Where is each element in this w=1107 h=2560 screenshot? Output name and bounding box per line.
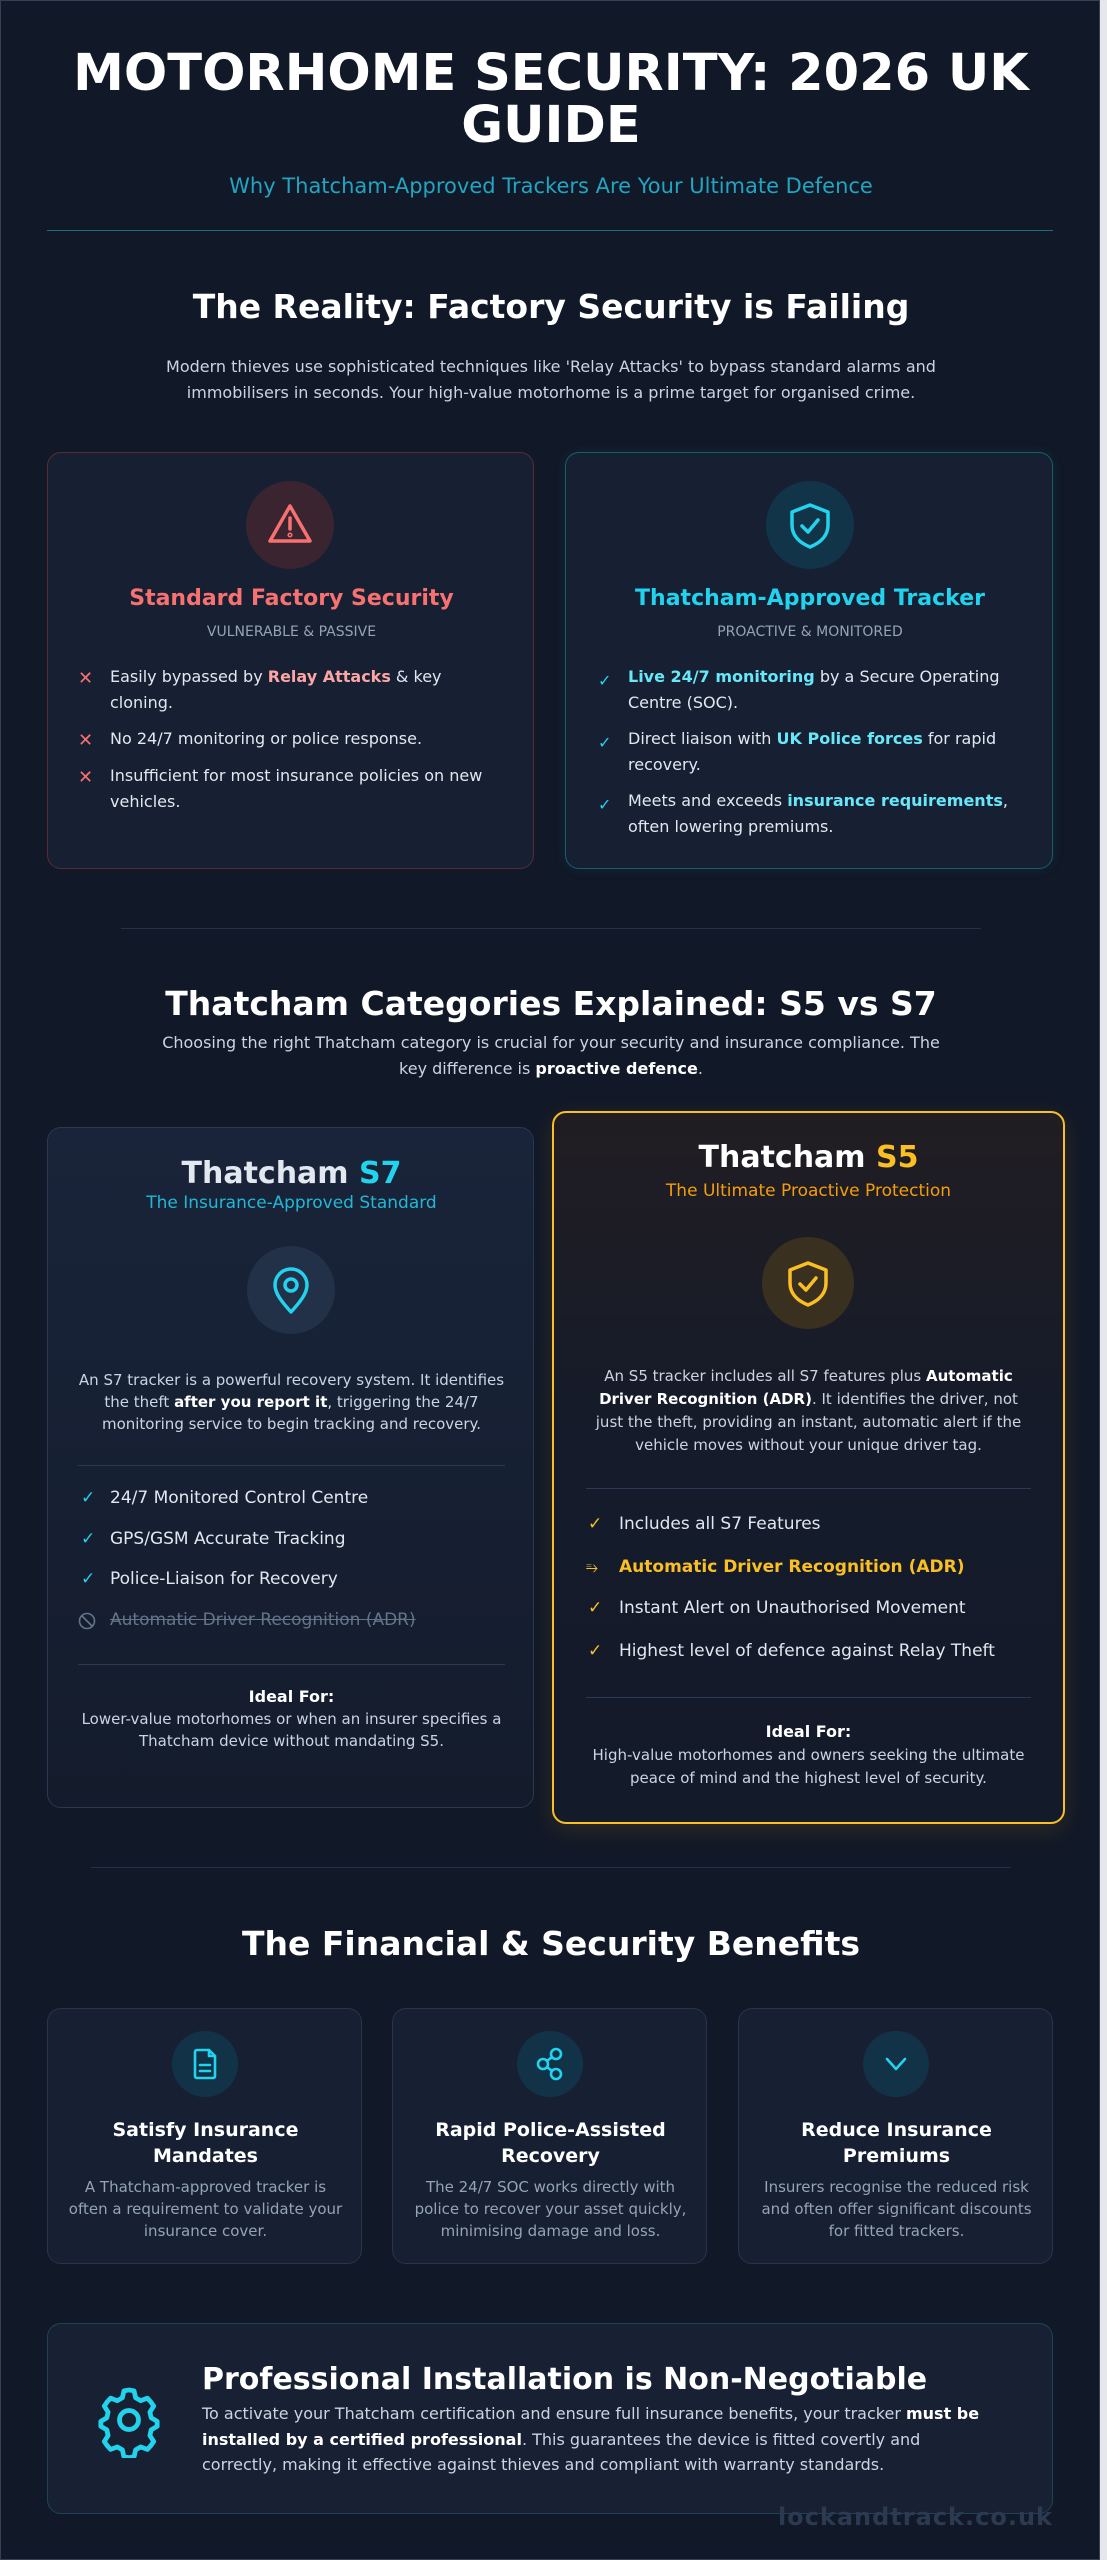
icon: chevron down xyxy=(863,2031,929,2097)
benefit: insurance mandates: Mandates xyxy=(153,2145,258,2167)
S5 ideal for xyxy=(593,1722,1024,1787)
S5 ideal for: High-value motorhomes and owners seeking the ultimate peace of mind and the highest level of security. xyxy=(593,1746,1024,1787)
list: ✕ xyxy=(78,767,93,788)
S7 features: 24/7 Monitored Control Centre xyxy=(110,1488,368,1508)
benefit: reduce premiums: Reduce Insurance xyxy=(801,2119,992,2141)
S7 features: GPS/GSM Accurate Tracking xyxy=(110,1529,346,1549)
card title: Thatcham-Approved Tracker xyxy=(635,586,985,611)
list: Insufficient for most insurance policies on new vehicles. xyxy=(110,766,482,810)
icon: gear xyxy=(98,2388,160,2458)
categories intro: Choosing the right Thatcham category is crucial for your security and insurance compliance. The key difference is proactive defence. xyxy=(162,1033,940,1078)
benefit: reduce premiums: Insurers recognise the reduced risk and often offer significant discounts for fitted trackers. xyxy=(761,2178,1032,2240)
S5 features xyxy=(586,1514,995,1661)
install heading: Professional Installation is Non-Negotiable xyxy=(202,2362,927,2397)
S7 title: Thatcham S7 xyxy=(182,1156,401,1191)
title xyxy=(73,44,1030,155)
S7 features: ✓ xyxy=(81,1488,95,1508)
S7 features: Automatic Driver Recognition (ADR) xyxy=(110,1610,416,1630)
S5 features: ✓ xyxy=(588,1641,602,1661)
S5 features: ✓ xyxy=(588,1514,602,1534)
S7 features: ✓ xyxy=(81,1529,95,1549)
S5 subtitle: The Ultimate Proactive Protection xyxy=(666,1181,951,1201)
list: No 24/7 monitoring or police response. xyxy=(110,729,422,748)
card title: Standard Factory Security xyxy=(129,586,454,611)
subtitle: Why Thatcham-Approved Trackers Are Your Ultimate Defence xyxy=(229,174,873,198)
card subtitle: VULNERABLE & PASSIVE xyxy=(207,624,376,640)
S5 features: Highest level of defence against Relay Theft xyxy=(619,1641,995,1661)
S5 features: Instant Alert on Unauthorised Movement xyxy=(619,1598,966,1618)
S7 subtitle: The Insurance-Approved Standard xyxy=(146,1193,437,1213)
benefit: police recovery xyxy=(392,2008,707,2264)
benefit: police recovery: Recovery xyxy=(501,2145,600,2167)
panel: standard factory security xyxy=(47,452,534,869)
list: ✓ xyxy=(598,671,611,690)
benefit: insurance mandates: A Thatcham-approved tracker is often a requirement to validate your insurance cover. xyxy=(69,2178,342,2240)
S5 title: Thatcham S5 xyxy=(698,1140,918,1175)
S5 ideal for: Ideal For: xyxy=(766,1722,851,1741)
benefit: police recovery: Rapid Police-Assisted xyxy=(435,2119,666,2141)
panel: professional installation xyxy=(47,2323,1053,2514)
install text: To activate your Thatcham certification and ensure full insurance benefits, your tracker must be installed by a certified professional. This guarantees the device is fitted covertly and correctly, making it effective against thieves and compliant with warranty standards. xyxy=(202,2404,979,2474)
benefit: reduce premiums xyxy=(738,2008,1053,2264)
panel: S5 xyxy=(552,1111,1065,1824)
intro text: Modern thieves use sophisticated techniques like 'Relay Attacks' to bypass standard alarms and immobilisers in seconds. Your high-value motorhome is a prime target for organised crime. xyxy=(166,357,936,402)
icon: gold shield xyxy=(762,1237,854,1329)
icon: document xyxy=(172,2031,238,2097)
icon: share xyxy=(517,2031,583,2097)
S7 features xyxy=(78,1488,416,1630)
list: ✓ xyxy=(598,795,611,814)
title: MOTORHOME SECURITY: 2026 UK xyxy=(73,44,1029,103)
list xyxy=(78,667,482,810)
icon: warning xyxy=(246,481,334,569)
list: Meets and exceeds insurance requirements, often lowering premiums. xyxy=(628,791,1008,836)
watermark: lockandtrack.co.uk xyxy=(778,2503,1053,2531)
S7 ideal for xyxy=(82,1687,501,1750)
S7 features: Police-Liaison for Recovery xyxy=(110,1569,338,1589)
heading: the reality: The Reality: Factory Security is Failing xyxy=(193,287,909,326)
benefit: insurance mandates xyxy=(47,2008,362,2264)
list: ✕ xyxy=(78,668,93,689)
card subtitle: PROACTIVE & MONITORED xyxy=(717,624,903,640)
list: Live 24/7 monitoring by a Secure Operating Centre (SOC). xyxy=(628,667,1000,712)
S7 features: ✓ xyxy=(81,1569,95,1589)
S5 features: Automatic Driver Recognition (ADR) xyxy=(619,1557,964,1577)
icon: location pin xyxy=(247,1246,335,1334)
list xyxy=(598,667,1008,836)
S7 description: An S7 tracker is a powerful recovery system. It identifies the theft after you report it, triggering the 24/7 monitoring service to begin tracking and recovery. xyxy=(79,1371,504,1433)
heading: categories: Thatcham Categories Explained: S5 vs S7 xyxy=(165,984,937,1023)
benefit: reduce premiums: Premiums xyxy=(843,2145,950,2167)
icon: shield check xyxy=(766,481,854,569)
S7 ideal for: Ideal For: xyxy=(249,1687,334,1706)
S5 features: ⥱ xyxy=(586,1558,598,1576)
S7 ideal for: Lower-value motorhomes or when an insurer specifies a Thatcham device without mandating S5. xyxy=(82,1710,501,1750)
benefit: insurance mandates: Satisfy Insurance xyxy=(112,2119,298,2141)
heading: benefits: The Financial & Security Benefits xyxy=(242,1924,860,1963)
S5 features: ✓ xyxy=(588,1598,602,1618)
list: ✓ xyxy=(598,733,611,752)
S5 description: An S5 tracker includes all S7 features plus Automatic Driver Recognition (ADR). It identifies the driver, not just the theft, providing an instant, automatic alert if the vehicle moves without your unique driver tag. xyxy=(596,1367,1021,1454)
panel: S7 xyxy=(47,1127,534,1808)
list: Easily bypassed by Relay Attacks & key cloning. xyxy=(110,667,442,712)
title: GUIDE xyxy=(461,96,641,155)
S5 features: Includes all S7 Features xyxy=(619,1514,821,1534)
list: ✕ xyxy=(78,730,93,751)
benefit: police recovery: The 24/7 SOC works directly with police to recover your asset quickly, minimising damage and loss. xyxy=(415,2178,686,2240)
list: Direct liaison with UK Police forces for rapid recovery. xyxy=(628,729,996,774)
panel: thatcham tracker xyxy=(565,452,1053,869)
